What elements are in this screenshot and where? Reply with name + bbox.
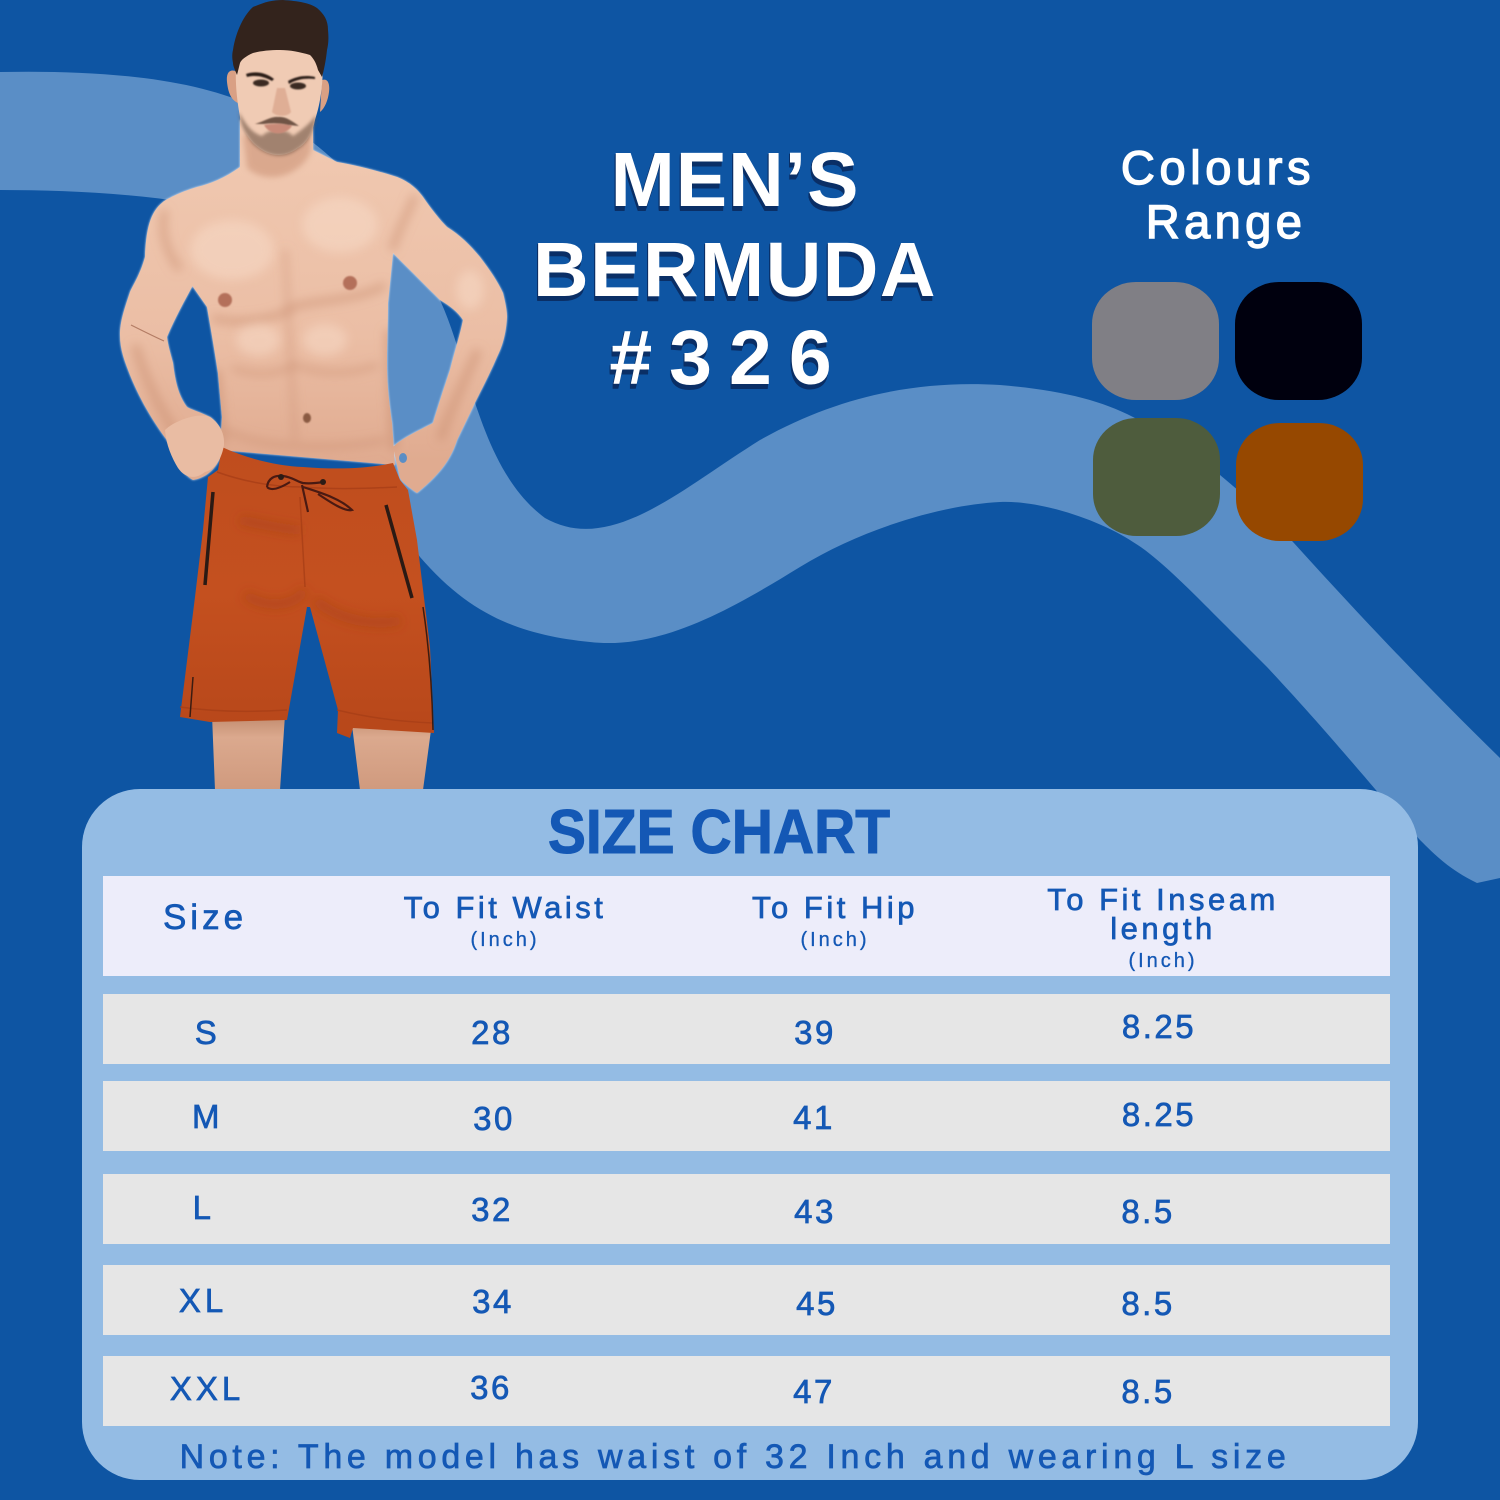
- title: [533, 137, 937, 401]
- row: M: M: [192, 1098, 222, 1135]
- row: L: 8.5: [1121, 1193, 1175, 1230]
- torso and arms: [120, 120, 507, 493]
- row: XL: 34: [472, 1283, 514, 1320]
- row: M: 30: [473, 1100, 515, 1137]
- row: XL: XL: [179, 1282, 227, 1319]
- row: L: L: [193, 1189, 213, 1226]
- face: [236, 44, 323, 155]
- row: S: S: [195, 1014, 219, 1051]
- row: M: 41: [793, 1099, 835, 1136]
- row: XXL: XXL: [170, 1370, 244, 1407]
- table header: (Inch): [1128, 950, 1198, 972]
- nipples and navel: [218, 276, 357, 423]
- row: S: 8.25: [1122, 1008, 1196, 1045]
- legs: [212, 715, 431, 790]
- hair: [232, 0, 328, 77]
- toggles: [278, 474, 326, 485]
- row: M: 8.25: [1122, 1096, 1196, 1133]
- note: Note: The model has waist of 32 Inch and wearing L size: [180, 1438, 1290, 1476]
- arm crease: [131, 325, 164, 341]
- body shading: [135, 195, 484, 450]
- table header: (Inch): [470, 929, 540, 951]
- heading: colours range: [1121, 141, 1315, 249]
- swatch: rust: [1236, 423, 1363, 541]
- facial features: [246, 72, 315, 133]
- panel: size chart: [82, 789, 1418, 1480]
- table header: To Fit Inseam: [1047, 882, 1279, 917]
- swatch: grey: [1092, 282, 1219, 400]
- heading: size chart: SIZE CHART: [548, 798, 890, 867]
- table header: To Fit Hip: [752, 890, 918, 925]
- row: M: [103, 1081, 1390, 1151]
- ears: [227, 70, 329, 112]
- title: MEN’S: [611, 137, 859, 223]
- row: L: 32: [471, 1191, 513, 1228]
- row: XL: 45: [796, 1285, 838, 1322]
- shorts details: [180, 472, 433, 730]
- title: BERMUDA: [533, 227, 937, 313]
- table header: Size: [163, 898, 247, 937]
- heading: colours range: Range: [1146, 195, 1306, 248]
- swatch: black: [1235, 282, 1362, 400]
- row: L: [103, 1174, 1390, 1244]
- finger gap: [399, 453, 407, 463]
- title: #326: [609, 315, 849, 401]
- table header: length: [1110, 911, 1216, 946]
- row: S: 39: [794, 1014, 836, 1051]
- row: XL: 8.5: [1121, 1285, 1175, 1322]
- row: S: 28: [471, 1014, 513, 1051]
- colour swatches: [1092, 282, 1363, 541]
- row: XXL: 36: [470, 1369, 512, 1406]
- neck shadow: [243, 135, 311, 177]
- table header: (Inch): [800, 929, 870, 951]
- row: L: 43: [794, 1193, 836, 1230]
- row: S: [103, 994, 1390, 1064]
- row: XL: [103, 1265, 1390, 1335]
- row: XXL: 8.5: [1121, 1373, 1175, 1410]
- row: XXL: 47: [793, 1373, 835, 1410]
- left hand: [165, 415, 224, 477]
- swatch: olive: [1093, 418, 1220, 536]
- table header: To Fit Waist: [404, 890, 606, 925]
- table header: [103, 876, 1390, 976]
- beard: [239, 112, 316, 156]
- heading: colours range: Colours: [1121, 141, 1315, 194]
- model photo illustration: [118, 0, 509, 789]
- shorts: [180, 447, 434, 738]
- row: XXL: [103, 1356, 1390, 1426]
